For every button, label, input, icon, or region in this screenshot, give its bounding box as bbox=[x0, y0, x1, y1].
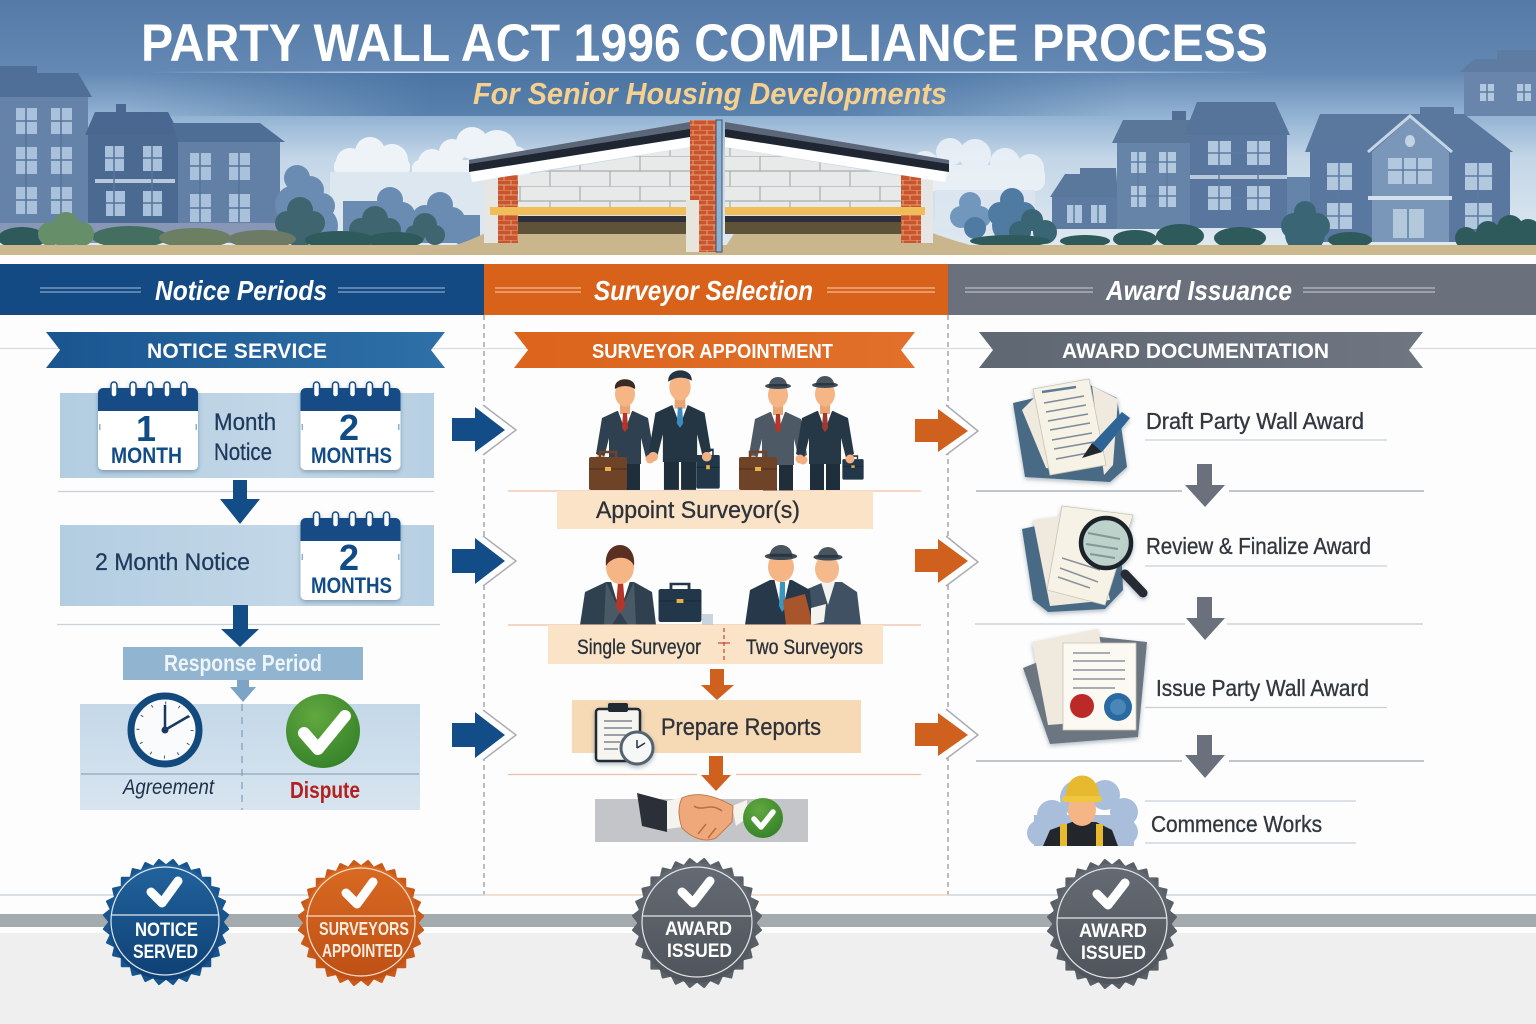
foundation soil bbox=[518, 216, 901, 234]
right trees bbox=[950, 188, 1536, 254]
arrow down bbox=[220, 480, 260, 524]
ribbon: award documentation: AWARD DOCUMENTATION bbox=[1062, 340, 1329, 363]
group: two surveyors bbox=[745, 545, 861, 625]
calendar: 2 months bbox=[300, 382, 400, 470]
text: draft party wall award: Draft Party Wall Award bbox=[1146, 408, 1364, 434]
right buildings bbox=[1050, 50, 1536, 242]
notice band two bbox=[60, 525, 434, 606]
ribbon: notice service: NOTICE SERVICE bbox=[147, 340, 327, 363]
notice band one bbox=[60, 393, 434, 478]
icon: review documents bbox=[1022, 506, 1143, 612]
badge: award issued final bbox=[1048, 860, 1176, 988]
left buildings bbox=[0, 66, 285, 243]
badge: award issued: AWARD bbox=[665, 919, 732, 940]
text: month notice bbox=[214, 409, 276, 466]
box: prepare reports bbox=[572, 700, 861, 753]
badge: notice served: NOTICE bbox=[135, 920, 198, 941]
ribbon: award documentation bbox=[979, 332, 1423, 368]
clouds left bbox=[334, 127, 530, 182]
left roof bbox=[469, 122, 690, 182]
calendar: 1 month: MONTH bbox=[111, 443, 182, 468]
label: dispute: Dispute bbox=[290, 777, 360, 803]
left end brick pier bbox=[498, 175, 518, 243]
calendar: 2 months second: MONTHS bbox=[311, 573, 392, 598]
text: month notice: Month bbox=[214, 409, 276, 436]
box: prepare reports: Prepare Reports bbox=[661, 714, 821, 741]
timber beam right bbox=[725, 207, 925, 215]
badge: surveyors appointed: SURVEYORS bbox=[319, 919, 409, 939]
calendar: 2 months second bbox=[300, 512, 400, 600]
badge: award issued: ISSUED bbox=[667, 941, 732, 962]
arrow: surveyor to award 2 bbox=[915, 536, 978, 586]
calendar: 2 months second: 2 bbox=[339, 537, 359, 578]
badge: surveyors appointed bbox=[299, 861, 423, 985]
label: agreement: Agreement bbox=[121, 776, 215, 799]
box: surveyor options: Two Surveyors bbox=[746, 636, 863, 659]
icon: green check bbox=[286, 694, 360, 768]
arrow down bbox=[221, 605, 259, 647]
small arrow down bbox=[230, 680, 256, 702]
arrow down bbox=[1185, 735, 1225, 778]
column header: Award Issuance bbox=[948, 264, 1536, 315]
text: issue party wall award: Issue Party Wall Award bbox=[1156, 675, 1369, 701]
text: commence works bbox=[1145, 801, 1356, 843]
arrow: surveyor to award 1 bbox=[915, 405, 978, 455]
icon: clipboard and clock bbox=[596, 703, 653, 764]
arrow down bbox=[1186, 597, 1225, 640]
icon: draft documents with pen bbox=[1013, 379, 1130, 482]
ribbon: notice service bbox=[46, 332, 445, 368]
icon: construction worker bbox=[1027, 776, 1138, 846]
central party wall bbox=[690, 120, 716, 252]
calendar: 2 months: 2 bbox=[339, 407, 359, 448]
icon: issue award with seals bbox=[1023, 629, 1147, 744]
badge: surveyors appointed: APPOINTED bbox=[322, 941, 403, 961]
heading: response period bbox=[123, 647, 363, 680]
panel: notice periods bbox=[46, 332, 445, 810]
badge: notice served: SERVED bbox=[133, 942, 198, 963]
badge: award issued final: ISSUED bbox=[1081, 943, 1146, 964]
column header: Notice Periods: Notice Periods bbox=[155, 275, 327, 306]
right end wall bbox=[921, 180, 933, 243]
panel: award issuance bbox=[975, 332, 1424, 846]
arrow: notice to surveyor 1 bbox=[452, 405, 516, 455]
group: single surveyor bbox=[580, 545, 713, 625]
icon: clock bbox=[131, 696, 199, 764]
arrow down bbox=[701, 669, 734, 700]
text: 2 month notice: 2 Month Notice bbox=[95, 549, 250, 576]
column header: Surveyor Selection: Surveyor Selection bbox=[594, 275, 813, 306]
arrow down bbox=[1185, 464, 1225, 507]
sand mounds bbox=[410, 232, 1015, 255]
clouds right bbox=[905, 138, 1045, 230]
right roof bbox=[725, 122, 949, 182]
badge: award issued bbox=[633, 859, 761, 987]
badge: award issued final: AWARD bbox=[1079, 921, 1147, 942]
block walls bbox=[518, 147, 901, 207]
ribbon: surveyor appointment: SURVEYOR APPOINTMENT bbox=[592, 341, 833, 363]
timber beam left bbox=[490, 207, 693, 215]
arrow: notice to surveyor 3 bbox=[452, 710, 516, 760]
header illustration bbox=[0, 0, 1536, 255]
calendar: 1 month: 1 bbox=[136, 408, 156, 449]
left end wall bbox=[484, 180, 498, 243]
heading: response period: Response Period bbox=[164, 650, 322, 676]
box: agreement handshake bbox=[595, 793, 808, 842]
calendar: 2 months: MONTHS bbox=[311, 443, 392, 468]
box: surveyor options bbox=[548, 625, 883, 664]
column header: Notice Periods bbox=[0, 264, 484, 315]
response panel bbox=[80, 704, 420, 810]
bottom band bbox=[0, 914, 1536, 1024]
centre illustration: party wall structure bbox=[410, 120, 1015, 255]
text: review finalize: Review & Finalize Award bbox=[1146, 533, 1371, 559]
box: appoint surveyors bbox=[557, 491, 873, 529]
box: surveyor options: Single Surveyor bbox=[577, 636, 701, 659]
subtitle band bbox=[130, 72, 1270, 116]
box: appoint surveyors: Appoint Surveyor(s) bbox=[596, 497, 800, 524]
column header: Award Issuance: Award Issuance bbox=[1105, 275, 1292, 306]
badge: notice served bbox=[104, 860, 228, 984]
calendar: 1 month bbox=[98, 382, 198, 470]
ground bbox=[0, 245, 1536, 255]
arrow: surveyor to award 3 bbox=[915, 709, 978, 759]
panel: surveyor selection bbox=[508, 332, 921, 842]
arrow: notice to surveyor 2 bbox=[452, 536, 516, 586]
group: surveyors with briefcases bbox=[589, 370, 864, 491]
damp proof strip bbox=[716, 120, 722, 252]
ribbon: surveyor appointment bbox=[514, 332, 915, 368]
title: PARTY WALL ACT 1996 COMPLIANCE PROCESS bbox=[141, 14, 1268, 73]
column header: Surveyor Selection bbox=[484, 264, 948, 315]
right end brick pier bbox=[901, 175, 921, 243]
arrow down bbox=[701, 756, 731, 791]
text: month notice: Notice bbox=[214, 439, 272, 466]
left trees bbox=[0, 165, 480, 249]
subtitle: For Senior Housing Developments bbox=[473, 76, 947, 111]
text: commence works: Commence Works bbox=[1151, 811, 1322, 837]
